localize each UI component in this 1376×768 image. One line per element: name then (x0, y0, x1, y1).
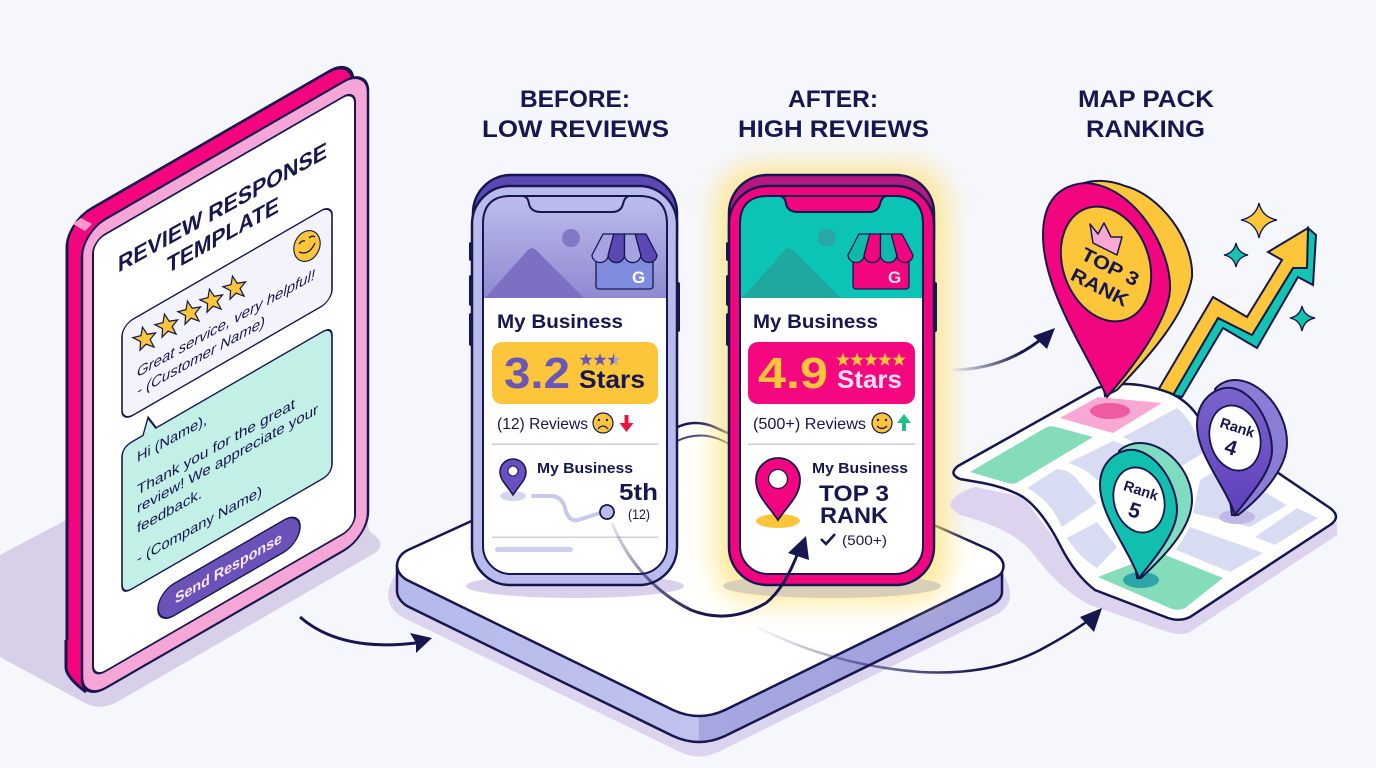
pin: top 3 rank (1043, 181, 1192, 397)
reply text: Hi (Name), (137, 412, 207, 466)
phone back (729, 175, 934, 275)
heading: after (738, 86, 929, 143)
arrow: before phone to after phone (612, 523, 809, 616)
reply bubble (122, 311, 332, 595)
sun (818, 229, 836, 247)
map blocks: lavender (1027, 408, 1318, 572)
pin label: 4 (1222, 435, 1240, 461)
notch fill (524, 197, 628, 213)
pin label: Rank (1121, 478, 1161, 505)
sad face (593, 413, 613, 433)
heading: before (482, 86, 669, 143)
pin label (1210, 415, 1257, 465)
map block: green (1098, 553, 1223, 610)
heading: map pack ranking: MAP PACK (1078, 86, 1215, 113)
storefront icon: G (888, 268, 901, 287)
phone body (729, 186, 934, 585)
phone body (472, 186, 677, 585)
tablet pink frame (82, 68, 368, 702)
local listing: 5th (619, 479, 658, 505)
divider (748, 444, 915, 445)
sun (562, 229, 580, 247)
pin face (1100, 450, 1177, 578)
local listing (756, 458, 908, 548)
pin: rank 4 (1197, 380, 1287, 524)
check mark (821, 534, 835, 544)
pin back (1075, 181, 1192, 396)
five gold stars (131, 274, 248, 351)
up arrow (897, 414, 911, 431)
rating stars (580, 353, 620, 366)
tablet: review response template (64, 58, 368, 702)
reviews count: (12) Reviews (497, 416, 588, 433)
crown (1090, 223, 1122, 255)
storefront icon (592, 234, 657, 289)
map sheet (953, 384, 1336, 620)
down arrow (620, 415, 634, 432)
review bubble (122, 158, 332, 424)
arrow: after phone to map (950, 336, 1045, 370)
smiley (289, 226, 325, 266)
phone shadow over glow (723, 574, 941, 598)
divider (492, 536, 658, 538)
reply text: - (Company Name) (137, 483, 262, 568)
tablet screen group (82, 68, 368, 702)
pin label: Rank (1218, 415, 1257, 442)
tablet shadow (0, 500, 380, 707)
pin label: RANK (1067, 265, 1132, 312)
map pin (500, 459, 526, 501)
tablet lower side (64, 640, 100, 692)
phone side buttons (726, 242, 937, 346)
phone screen (483, 196, 667, 574)
reply text: Thank you for the great (137, 396, 296, 499)
sparkles (1224, 203, 1315, 331)
platform (388, 423, 1010, 756)
pin label: TOP 3 (1077, 244, 1142, 291)
phone screen (740, 196, 923, 574)
arrow: tablet to platform (300, 617, 432, 653)
hero image (483, 196, 667, 301)
mountain (485, 248, 584, 298)
pin label: 5 (1125, 498, 1144, 524)
platform shadow (388, 570, 1010, 756)
heading: after: AFTER: (788, 86, 878, 113)
route line (533, 496, 600, 520)
pin badge (1106, 462, 1172, 538)
teal sparkle (1290, 306, 1315, 331)
local listing: (12) (628, 506, 650, 522)
phone back (473, 175, 677, 275)
rating badge (492, 342, 658, 404)
map block: green (970, 426, 1093, 484)
mountain (742, 248, 841, 298)
heading: map pack ranking (1078, 86, 1215, 143)
route marker (600, 505, 614, 519)
local listing: My Business (812, 461, 908, 477)
send response button: Send Response (175, 529, 282, 608)
pin badge (1045, 194, 1167, 334)
storefront icon: G (632, 268, 645, 287)
phone side buttons (469, 242, 680, 346)
heading: map pack ranking: RANKING (1086, 116, 1205, 143)
reviews count (497, 413, 634, 433)
pin face (1197, 388, 1272, 515)
pin label (1114, 478, 1161, 528)
divider (492, 444, 658, 445)
notch fill (781, 197, 885, 213)
pin badge (1202, 400, 1268, 476)
local listing: RANK (820, 503, 888, 528)
business name: My Business (497, 312, 623, 333)
hero image (740, 196, 923, 301)
happy face (872, 413, 892, 433)
local listing (500, 459, 658, 522)
local listing: (500+) (842, 532, 887, 548)
reviews count: (500+) Reviews (753, 416, 866, 433)
pin shadow (1219, 510, 1255, 524)
local listing: My Business (537, 461, 633, 477)
review text: Great service, very helpful! (137, 267, 316, 381)
rating badge: 4.9 (758, 349, 828, 398)
local listing: TOP 3 (819, 481, 889, 506)
pin shadow: top 3 (1090, 403, 1130, 419)
map shadow (950, 487, 1337, 634)
yellow sparkle (1241, 203, 1277, 238)
reviews count (753, 413, 911, 433)
tablet back edge (67, 58, 353, 678)
tablet white screen (93, 90, 355, 678)
connector between phones (677, 436, 732, 446)
tablet title: TEMPLATE (167, 192, 279, 279)
pin: rank 5 (1100, 443, 1192, 588)
map block: pink (1060, 397, 1162, 433)
phone glow (716, 165, 948, 602)
reply text (137, 350, 318, 568)
phone: before low reviews (469, 175, 680, 585)
corner highlight (73, 218, 92, 231)
pin face (1043, 183, 1170, 397)
rating badge: Stars (579, 366, 645, 394)
business name: My Business (753, 312, 878, 333)
arrow yellow face (1157, 228, 1308, 395)
platform side (397, 565, 1002, 742)
platform top (397, 423, 1004, 716)
arrow teal edge (1173, 228, 1316, 397)
pin label (1067, 244, 1142, 312)
reply text: feedback. (137, 485, 202, 537)
pin shadow (1123, 572, 1159, 588)
heading: after: HIGH REVIEWS (738, 116, 929, 143)
heading: before: BEFORE: (520, 86, 630, 113)
reply text: review! We appreciate your (137, 401, 318, 517)
review text: - (Customer Name) (137, 314, 265, 400)
arrow: after phone to map bottom (753, 608, 1102, 673)
pin back (1119, 443, 1192, 578)
send response button (158, 511, 300, 625)
teal sparkle (1224, 243, 1248, 267)
arrowhead: map pin (1033, 328, 1055, 349)
rating badge: 3.2 (504, 349, 570, 398)
tablet title: REVIEW RESPONSE (118, 138, 327, 278)
heading: before: LOW REVIEWS (482, 116, 669, 143)
phone: after high reviews (726, 175, 937, 585)
pin back (1215, 380, 1287, 515)
placeholder bar (495, 547, 573, 552)
rising chart arrow (1157, 228, 1316, 397)
rating badge (748, 342, 915, 404)
map (953, 384, 1336, 620)
storefront icon (848, 234, 913, 289)
phone shadow (466, 574, 684, 598)
map pin (756, 458, 800, 528)
rating badge: Stars (837, 366, 902, 394)
rating stars (836, 353, 906, 366)
